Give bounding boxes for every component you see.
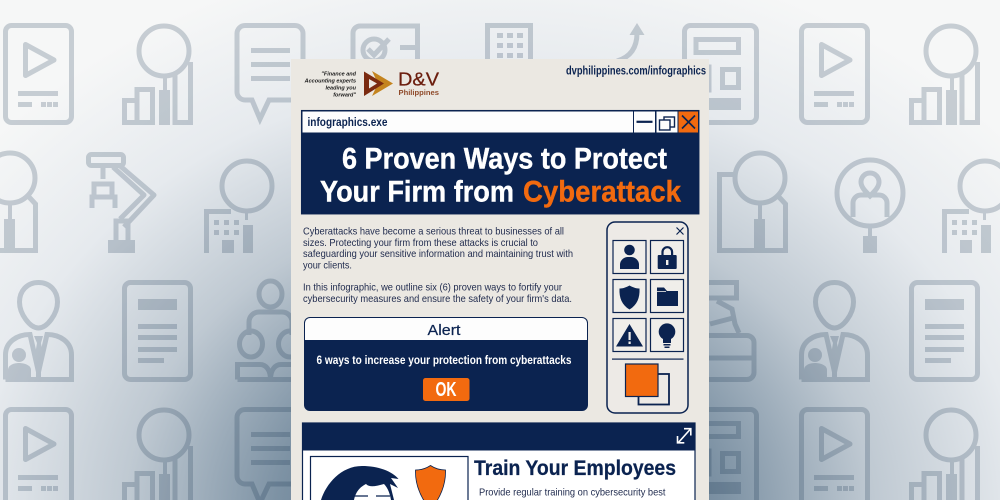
intro text: your clients.	[303, 260, 352, 272]
icon: folder	[650, 280, 684, 312]
icon: layout document bottom	[684, 410, 756, 500]
icon: light bulb	[650, 318, 684, 352]
icon: padlock	[650, 240, 684, 274]
header: tagline and logo	[304, 70, 439, 98]
front orange square	[626, 364, 658, 396]
alert heading: Alert	[428, 322, 461, 339]
icon: building	[488, 26, 530, 122]
icon: magnifier chart right	[912, 26, 978, 125]
window file name: infographics.exe	[308, 117, 388, 129]
tagline: Accounting experts	[304, 78, 356, 84]
icon: magnifier chart	[124, 26, 190, 125]
icon: growth arrow	[617, 23, 644, 61]
card heading: Train Your Employees	[474, 456, 676, 480]
icon: business person	[6, 282, 72, 382]
icon: play document	[6, 26, 72, 122]
panel: infographic sheet	[291, 59, 709, 500]
icon: magnifier building right	[944, 161, 1000, 253]
logo wordmark: D&V	[398, 70, 439, 90]
logo subtitle: Philippines	[398, 88, 439, 97]
card header bar	[302, 423, 696, 450]
button: minimize	[634, 112, 655, 132]
button: restore	[656, 112, 678, 132]
icon: speech bubble bottom	[237, 410, 303, 500]
title line 2: Your Firm from	[320, 176, 514, 208]
icon: text document	[124, 282, 190, 380]
icon: robot arm	[88, 154, 154, 253]
tagline: forward"	[333, 92, 356, 98]
intro text: cybersecurity measures and ensure the safety of your firm's data.	[303, 294, 572, 305]
sidebar close icon	[676, 228, 684, 234]
alert header	[305, 318, 587, 340]
button: close	[678, 112, 698, 132]
panel: alert dialog	[304, 317, 588, 411]
icon: warning	[613, 318, 646, 352]
icon: play document right	[802, 26, 868, 122]
back square	[638, 374, 669, 404]
panel: icon sidebar	[607, 222, 688, 413]
icon: person in magnifier	[837, 160, 903, 253]
intro text	[303, 227, 573, 305]
icon: magnifier document right	[720, 153, 786, 253]
title bar	[302, 112, 633, 132]
icon: text document right	[912, 282, 978, 380]
intro text: sizes. Protecting your firm from these attacks is crucial to	[303, 238, 538, 249]
intro text: In this infographic, we outline six (6) proven ways to fortify your	[303, 283, 562, 294]
icon: check card	[353, 26, 420, 83]
icon: stacked items	[689, 282, 756, 380]
illustration frame	[310, 456, 468, 500]
tagline: leading you	[325, 86, 357, 92]
icon: user	[613, 240, 646, 274]
icon: magnifier chart bottom	[124, 410, 190, 500]
tagline: "Finance and	[321, 72, 357, 78]
logo mark	[364, 71, 393, 96]
icon: magnifier chart bottom right	[912, 410, 978, 500]
icon: business person right	[802, 282, 868, 382]
icon: shield	[613, 280, 646, 312]
title line 1: 6 Proven Ways to Protect	[342, 142, 667, 176]
icon: speech bubble	[237, 26, 303, 119]
ok button: OK	[436, 379, 457, 401]
intro text: Cyberattacks have become a serious threat to businesses of all	[303, 227, 564, 238]
icon: group of people	[238, 281, 304, 380]
icon: expand arrows	[678, 429, 691, 443]
icon: play document bottom right	[802, 410, 868, 500]
icon: layout document	[684, 26, 756, 122]
website url: dvphilippines.com/infographics	[566, 66, 706, 78]
icon: magnifier building	[206, 161, 272, 253]
illustration: orange shield	[415, 466, 446, 500]
ok button	[423, 378, 470, 401]
icon: play document bottom	[6, 410, 72, 500]
panel: title window	[302, 111, 699, 214]
intro text: safeguarding your sensitive information and maintaining trust with	[303, 249, 573, 260]
alert message: 6 ways to increase your protection from cyberattacks	[316, 353, 572, 367]
icon: magnifier document left	[0, 153, 36, 253]
sidebar divider	[612, 358, 684, 360]
card body text: Provide regular training on cybersecurity best	[479, 488, 666, 498]
title accent word: Cyberattack	[523, 176, 681, 208]
panel: step 1 card	[302, 423, 696, 500]
illustration: employee head	[321, 466, 398, 500]
